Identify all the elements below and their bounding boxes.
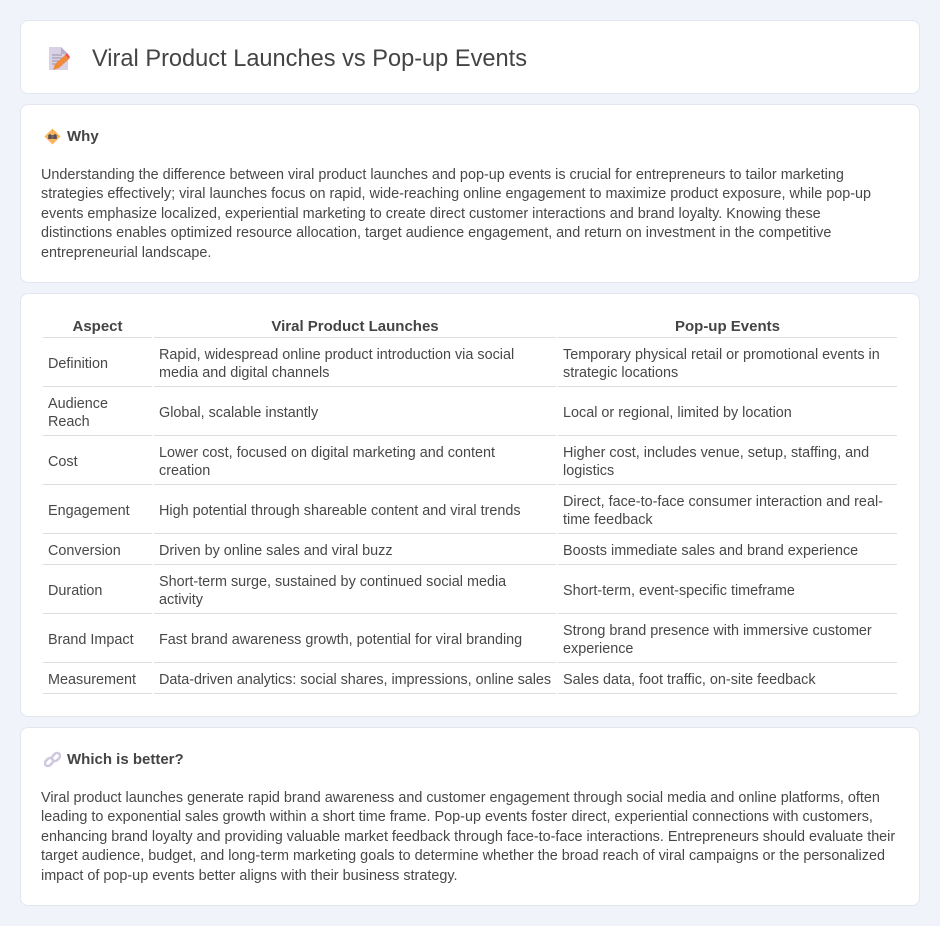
comparison table: Conversion — [48, 543, 121, 559]
comparison table: Cost — [48, 454, 78, 470]
comparison table: Rapid, widespread online product introduction via social — [159, 347, 514, 363]
comparison table: Pop-up Events — [675, 318, 780, 335]
icon: document with pencil — [49, 47, 70, 70]
comparison table: strategic locations — [563, 365, 678, 381]
comparison table: Engagement — [48, 503, 130, 519]
comparison table: creation — [159, 463, 210, 479]
comparison table: time feedback — [563, 512, 653, 528]
why text block — [41, 167, 871, 261]
comparison table: Aspect — [72, 318, 123, 335]
comparison table: Lower cost, focused on digital marketing and content — [159, 445, 495, 461]
comparison table: Reach — [48, 414, 90, 430]
comparison table: Brand Impact — [48, 632, 134, 648]
comparison table: logistics — [563, 463, 614, 479]
comparison table: High potential through shareable content and viral trends — [159, 503, 521, 519]
panel: which is better — [20, 727, 920, 906]
comparison table: Duration — [48, 583, 102, 599]
panel: why — [20, 104, 920, 283]
heading: why: Why — [67, 128, 99, 145]
comparison table: Data-driven analytics: social shares, impressions, online sales — [159, 672, 551, 688]
why text block: Understanding the difference between viral product launches and pop-up events is crucial for entrepreneurs to tailor marketing — [41, 167, 844, 183]
comparison table: Direct, face-to-face consumer interaction and real- — [563, 494, 883, 510]
comparison table: Temporary physical retail or promotional events in — [563, 347, 880, 363]
comparison table: activity — [159, 592, 203, 608]
comparison table: Fast brand awareness growth, potential for viral branding — [159, 632, 522, 648]
comparison table: Definition — [48, 356, 108, 372]
why text block: events emphasize localized, experiential marketing to create direct customer interactions and brand loyalty. Knowing these — [41, 206, 821, 222]
comparison table — [43, 318, 897, 694]
why text block: distinctions enables optimized resource allocation, target audience engagement, and return on investment in the competitive — [41, 225, 831, 241]
comparison table: Sales data, foot traffic, on-site feedback — [563, 672, 816, 688]
comparison table: Local or regional, limited by location — [563, 405, 792, 421]
panel: comparison table — [20, 293, 920, 717]
which is better text block: target audience, budget, and long-term marketing goals to determine whether the broad reach of viral campaigns or the personalized — [41, 848, 885, 864]
which is better text block: impact of pop-up events better aligns with their business strategy. — [41, 868, 457, 884]
icon: orange diamond — [44, 128, 60, 144]
which is better text block — [41, 790, 895, 884]
why text block: strategies effectively; viral launches focus on rapid, wide-reaching online engagement to maximize product exposure, while pop-up — [41, 186, 871, 202]
comparison table: Global, scalable instantly — [159, 405, 318, 421]
which is better text block: leading to exponential sales growth within a short time frame. Pop-up events foster direct, experiential connections with customers, — [41, 809, 873, 825]
icon: link — [44, 752, 61, 768]
header panel — [20, 20, 920, 94]
comparison table: Measurement — [48, 672, 136, 688]
why text block: entrepreneurial landscape. — [41, 245, 211, 261]
comparison table: Audience — [48, 396, 108, 412]
which is better text block: Viral product launches generate rapid brand awareness and customer engagement through social media and online platforms, often — [41, 790, 880, 806]
comparison table: Higher cost, includes venue, setup, staffing, and — [563, 445, 869, 461]
which is better text block: enhancing brand loyalty and providing valuable market feedback through face-to-face interactions. Entrepreneurs should evaluate their — [41, 829, 895, 845]
title: Viral Product Launches vs Pop-up Events — [92, 46, 527, 72]
comparison table: Strong brand presence with immersive customer — [563, 623, 872, 639]
comparison table: media and digital channels — [159, 365, 329, 381]
comparison table: Short-term, event-specific timeframe — [563, 583, 795, 599]
comparison table: experience — [563, 641, 633, 657]
comparison table: Viral Product Launches — [271, 318, 439, 335]
comparison table: Driven by online sales and viral buzz — [159, 543, 393, 559]
comparison table: Short-term surge, sustained by continued social media — [159, 574, 506, 590]
comparison table: Boosts immediate sales and brand experience — [563, 543, 858, 559]
heading: which is better: Which is better? — [67, 751, 184, 768]
